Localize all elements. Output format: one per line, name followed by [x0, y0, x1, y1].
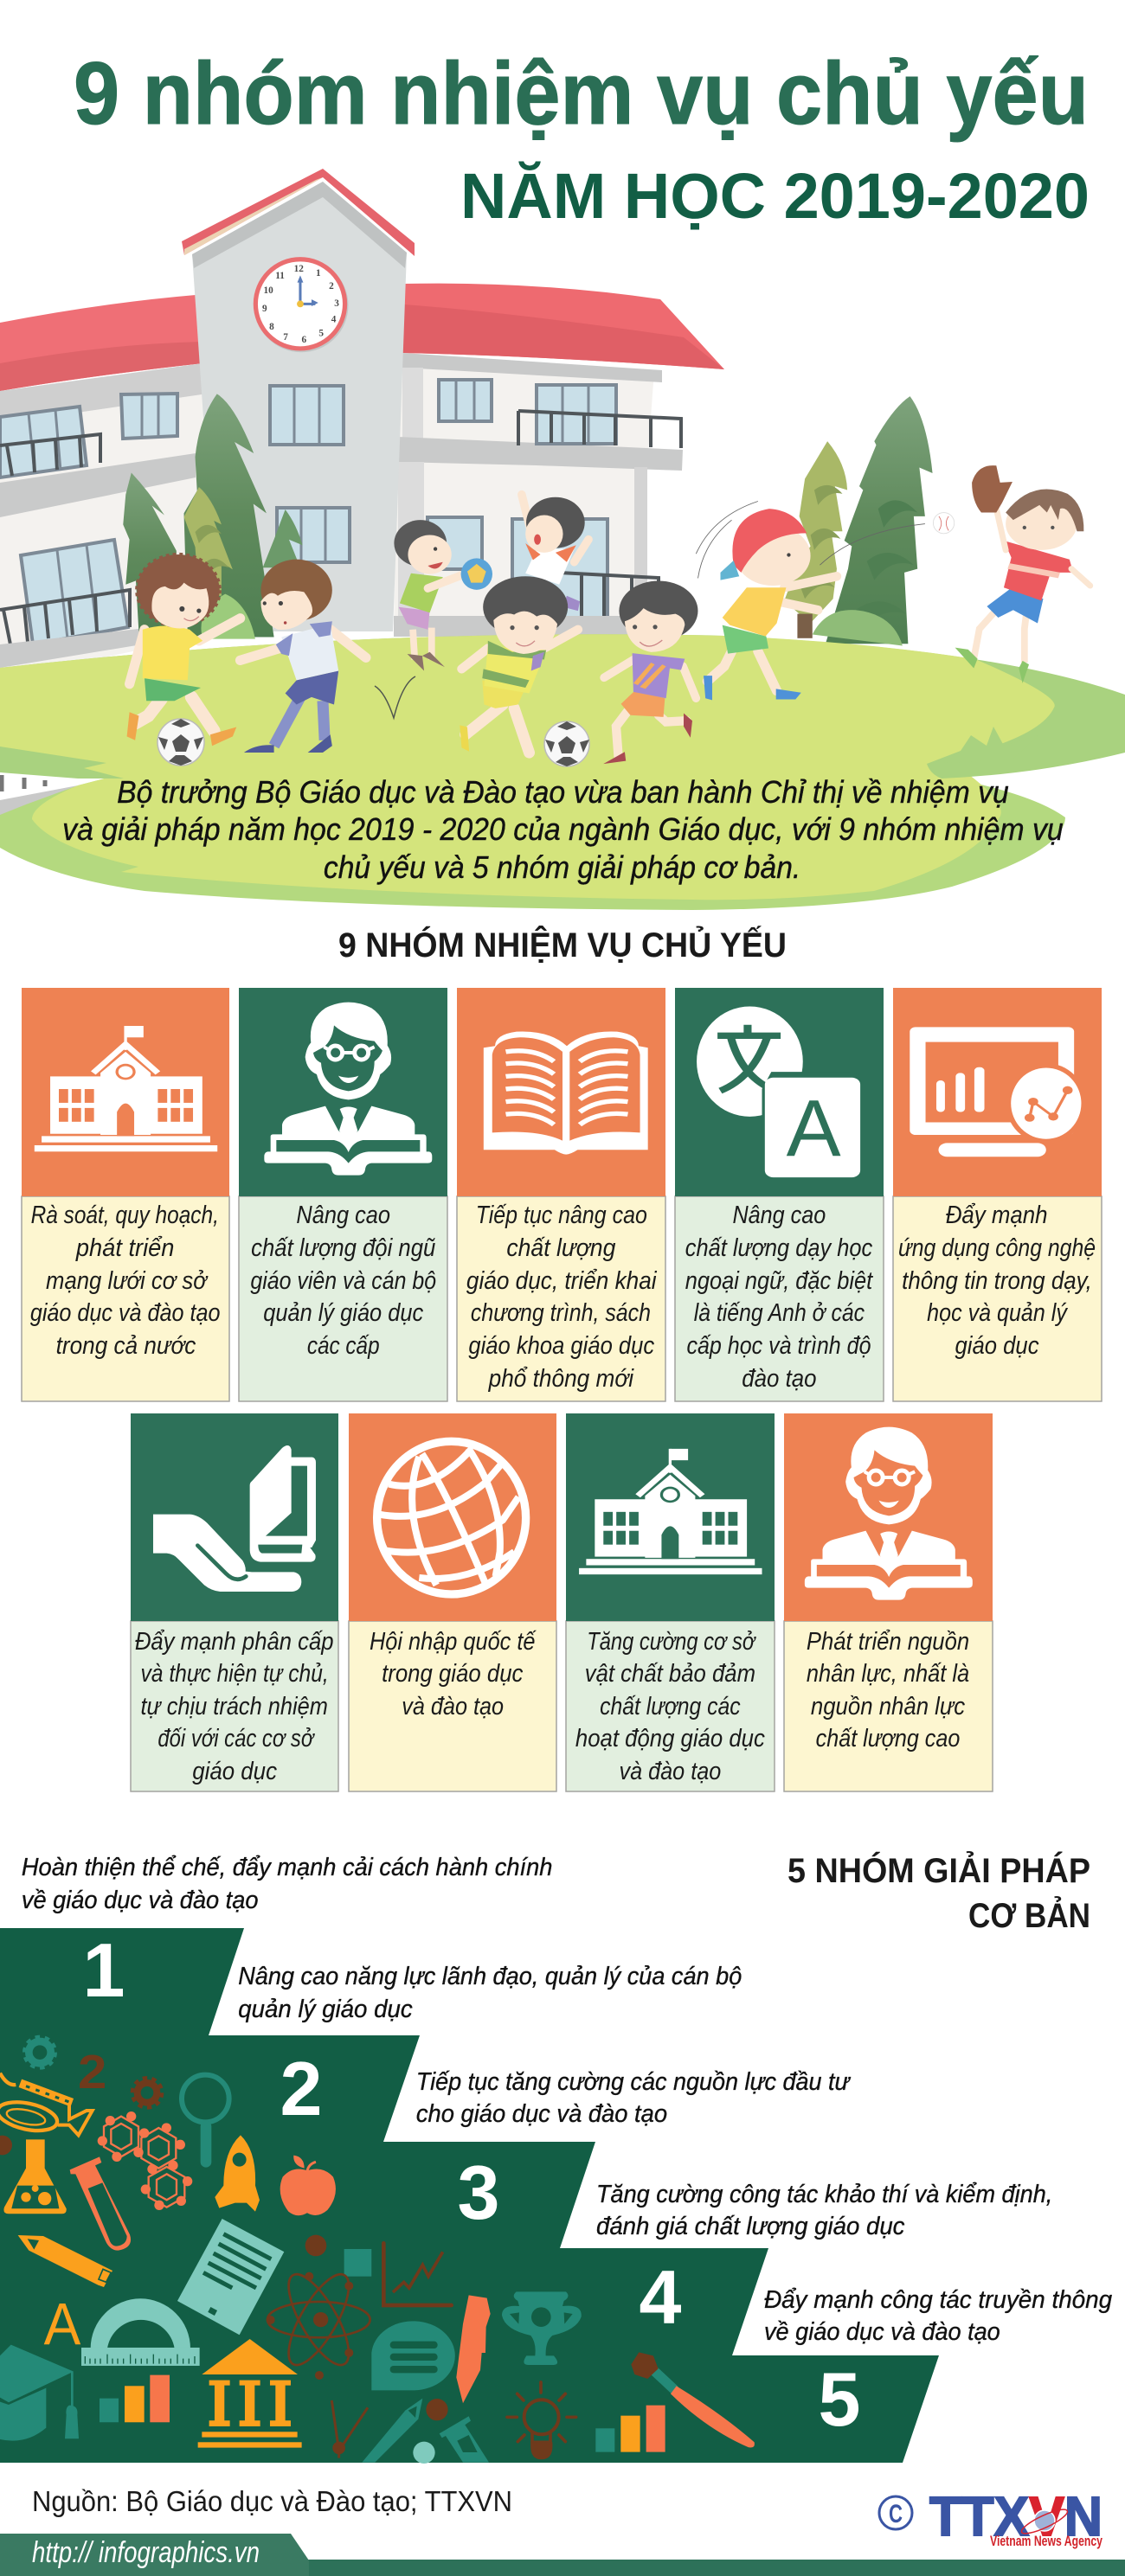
- number 5: 5: [819, 2356, 860, 2442]
- text: task 6: [135, 1627, 334, 1785]
- left wing: [0, 394, 208, 679]
- text: task 5: học và quản lý: [927, 1298, 1068, 1327]
- intro text: [62, 775, 1064, 886]
- text: task 6: Đẩy mạnh phân cấp: [135, 1627, 334, 1656]
- child: red cap: [696, 502, 925, 700]
- text: task 1: giáo dục và đào tạo: [30, 1298, 221, 1327]
- child: red shirt with baseball glove: [933, 465, 1090, 683]
- text: task 3: giáo dục, triển khai: [466, 1266, 658, 1295]
- child: green-yellow shirt: [460, 576, 580, 753]
- panel: task 6: [131, 1413, 338, 1791]
- child: white shirt and navy shorts: [241, 560, 366, 753]
- clock: 8: [269, 322, 274, 332]
- text: task 9: [807, 1627, 969, 1753]
- education icons right cluster: [362, 2243, 755, 2464]
- source: Nguồn: Bộ Giáo dục và Đào tạo; TTXVN: [32, 2485, 512, 2517]
- clock: 11: [275, 271, 285, 281]
- text: task 8: và đào tạo: [620, 1757, 721, 1785]
- panel: task 5: [893, 988, 1102, 1401]
- text: task 8: vật chất bảo đảm: [585, 1659, 755, 1688]
- text: task 1: mạng lưới cơ sở: [46, 1266, 209, 1295]
- text: task 1: phát triển: [75, 1234, 174, 1262]
- solution 1 text: quản lý giáo dục: [238, 1995, 413, 2023]
- clock: 9: [262, 304, 267, 314]
- clock: 5: [318, 329, 324, 339]
- icon: globe: [377, 1441, 526, 1594]
- solution: top text: [22, 1853, 552, 1914]
- footer band: [0, 2534, 1125, 2576]
- solution 2 text: cho giáo dục và đào tạo: [416, 2099, 667, 2128]
- text: task 2: giáo viên và cán bộ: [250, 1266, 436, 1295]
- text: task 3: [466, 1201, 658, 1393]
- heading: 5 solutions: 5 NHÓM GIẢI PHÁP: [788, 1850, 1090, 1890]
- text: task 8: chất lượng các: [600, 1692, 741, 1721]
- panel: task 3: [457, 988, 665, 1401]
- text: task 5: thông tin trong dạy,: [902, 1266, 1092, 1295]
- clock: 7: [283, 332, 288, 343]
- lower lawn: [0, 774, 1065, 910]
- clock: 3: [334, 298, 339, 309]
- education icons left cluster: A: [44, 2292, 81, 2358]
- text: task 9: nguồn nhân lực: [811, 1692, 966, 1721]
- icon: translation: [697, 1006, 861, 1178]
- panel: task 2: [239, 988, 447, 1401]
- text: task 1: [30, 1201, 221, 1360]
- number 1: 1: [83, 1927, 125, 2013]
- clock: 6: [301, 335, 306, 345]
- child: purple shirt: [603, 580, 698, 764]
- school building: [0, 169, 724, 679]
- text: task 7: Hội nhập quốc tế: [370, 1627, 537, 1656]
- solution 1 text: [238, 1962, 742, 2023]
- text: task 7: trong giáo dục: [382, 1659, 524, 1688]
- icon: open book: [484, 1031, 648, 1155]
- number 2: 2: [280, 2046, 322, 2131]
- clock: 10: [263, 285, 273, 296]
- child: arms raised: [522, 495, 588, 585]
- solution 3 text: Tăng cường công tác khảo thí và kiểm định,: [596, 2180, 1052, 2208]
- text: task 6: đối với các cơ sở: [158, 1724, 315, 1753]
- text: task 7: [370, 1627, 537, 1721]
- text: task 2: [250, 1201, 436, 1360]
- text: task 4: [685, 1201, 874, 1393]
- number 3: 3: [458, 2150, 499, 2235]
- title: NĂM HỌC 2019-2020: [460, 160, 1090, 232]
- text: task 4: chất lượng dạy học: [685, 1234, 873, 1262]
- text: task 1: Rà soát, quy hoạch,: [31, 1201, 219, 1229]
- text: task 8: hoạt động giáo dục: [575, 1724, 765, 1753]
- text: task 1: trong cả nước: [56, 1331, 196, 1360]
- solution: top text: về giáo dục và đào tạo: [22, 1886, 258, 1914]
- text: task 5: giáo dục: [955, 1331, 1039, 1360]
- text: task 3: Tiếp tục nâng cao: [476, 1201, 647, 1229]
- child: holding blue ball: [394, 520, 492, 670]
- text: task 9: Phát triển nguồn: [807, 1627, 969, 1656]
- text: task 6: và thực hiện tự chủ,: [141, 1659, 329, 1688]
- clock: [254, 257, 348, 352]
- text: task 4: đào tạo: [742, 1364, 817, 1393]
- icon: translation: A: [787, 1084, 841, 1173]
- solution 3 text: đánh giá chất lượng giáo dục: [596, 2212, 905, 2240]
- text: task 3: phổ thông mới: [488, 1364, 634, 1393]
- text: task 6: giáo dục: [192, 1757, 278, 1785]
- text: task 5: Đẩy mạnh: [946, 1201, 1047, 1229]
- text: task 9: chất lượng cao: [816, 1724, 960, 1753]
- text: task 2: các cấp: [307, 1331, 380, 1360]
- education icons left cluster: [0, 2037, 371, 2458]
- fence and path at left edge: [0, 772, 78, 815]
- panel: task 4: [675, 988, 884, 1401]
- bird / grass tick mark: [375, 676, 415, 718]
- clock: 2: [329, 281, 334, 292]
- text: task 2: Nâng cao: [296, 1201, 390, 1229]
- logo: TTXVN: C: [889, 2500, 903, 2528]
- title: [74, 44, 1090, 232]
- solution 3 text: [596, 2180, 1052, 2240]
- text: task 3: chương trình, sách: [471, 1298, 651, 1327]
- text: task 4: là tiếng Anh ở các: [694, 1298, 865, 1327]
- illustration: school and playing children: [0, 169, 1125, 910]
- icon: computer with charts: [910, 1027, 1086, 1157]
- logo: TTXVN: TTXVN: [929, 2485, 1102, 2547]
- text: task 3: giáo khoa giáo dục: [468, 1331, 655, 1360]
- football 1: [158, 719, 204, 766]
- text: task 7: và đào tạo: [402, 1692, 504, 1721]
- football 2: [544, 721, 589, 766]
- upper lawn: [0, 634, 1125, 779]
- title: 9 nhóm nhiệm vụ chủ yếu: [74, 44, 1089, 143]
- clock: 1: [316, 268, 321, 279]
- child: yellow shirt with ball: [127, 554, 241, 746]
- trees right: [784, 396, 933, 645]
- website url: http:// infographics.vn: [32, 2536, 260, 2569]
- solution 4 text: Đẩy mạnh công tác truyền thông: [764, 2285, 1112, 2314]
- text: task 2: chất lượng đội ngũ: [251, 1234, 435, 1262]
- solution 2 text: [416, 2067, 852, 2128]
- right wing: [394, 353, 653, 636]
- icon: teacher with book: [805, 1427, 973, 1600]
- solution 4 text: [764, 2285, 1112, 2346]
- panel: task 1: [22, 988, 229, 1401]
- tower: [192, 182, 407, 631]
- solution 1 text: Nâng cao năng lực lãnh đạo, quản lý của cán bộ: [238, 1962, 742, 1990]
- solution: top text: Hoàn thiện thể chế, đẩy mạnh cải cách hành chính: [22, 1853, 552, 1881]
- icon: school: [35, 1026, 217, 1151]
- icon: school building: [579, 1449, 762, 1574]
- text: task 5: [898, 1201, 1096, 1360]
- text: task 4: Nâng cao: [733, 1201, 826, 1229]
- heading: 5 solutions: CƠ BẢN: [968, 1895, 1090, 1935]
- panel: task 9: [784, 1413, 993, 1791]
- panel: task 8: [566, 1413, 775, 1791]
- text: task 9: nhân lực, nhất là: [807, 1659, 969, 1688]
- intro text: chủ yếu và 5 nhóm giải pháp cơ bản.: [324, 850, 800, 886]
- text: task 5: ứng dụng công nghệ: [898, 1234, 1096, 1262]
- intro text: và giải pháp năm học 2019 - 2020 của ngành Giáo dục, với 9 nhóm nhiệm vụ: [62, 812, 1064, 848]
- text: task 8: Tăng cường cơ sở: [587, 1627, 756, 1656]
- education icons left cluster: 2: [78, 2045, 106, 2099]
- clock: 12: [294, 264, 304, 274]
- solution 4 text: về giáo dục và đào tạo: [764, 2317, 1000, 2346]
- panel: task 7: [349, 1413, 556, 1791]
- staircase panel: 5 solutions: [0, 1927, 939, 2464]
- heading: 5 solutions: [788, 1850, 1090, 1935]
- icon: teacher: [264, 1003, 432, 1176]
- solution 2 text: Tiếp tục tăng cường các nguồn lực đầu tư: [416, 2067, 852, 2096]
- text: task 2: quản lý giáo dục: [263, 1298, 424, 1327]
- heading: 9 tasks: 9 NHÓM NHIỆM VỤ CHỦ YẾU: [338, 925, 787, 964]
- icon: hand holding book: [153, 1445, 316, 1592]
- intro text: Bộ trưởng Bộ Giáo dục và Đào tạo vừa ban hành Chỉ thị về nhiệm vụ: [117, 775, 1009, 811]
- text: task 6: tự chịu trách nhiệm: [141, 1692, 328, 1721]
- number 4: 4: [640, 2254, 682, 2340]
- clock: 4: [331, 315, 337, 325]
- text: task 4: ngoại ngữ, đặc biệt: [685, 1266, 874, 1295]
- trees left: [123, 394, 303, 639]
- text: task 3: chất lượng: [506, 1234, 616, 1262]
- text: task 8: [575, 1627, 765, 1785]
- text: task 4: cấp học và trình độ: [686, 1331, 871, 1360]
